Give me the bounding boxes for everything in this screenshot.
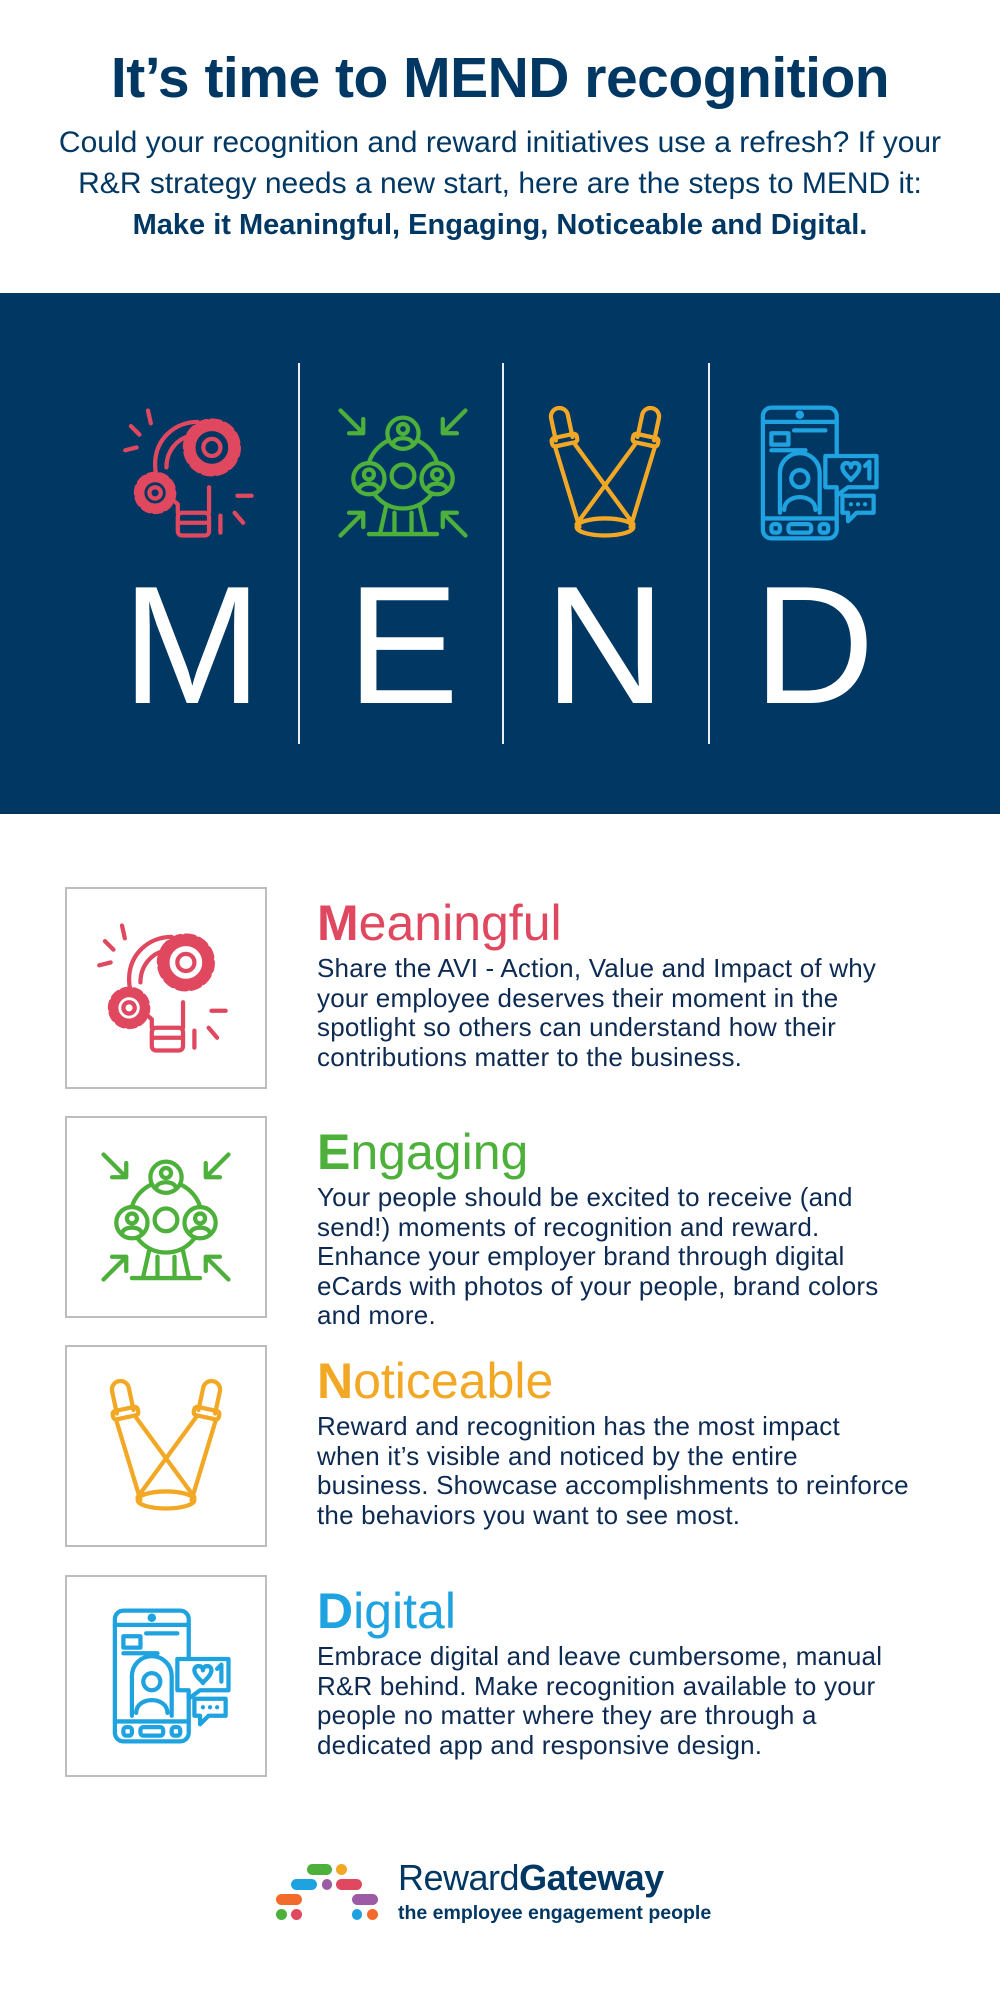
hero band: MEND (0, 293, 1000, 814)
icon box: spotlights (65, 1345, 267, 1547)
icon box: bulb (65, 887, 267, 1089)
icon: spotlights (548, 406, 662, 538)
logo mark (276, 1864, 378, 1920)
heading: Digital: Digital (317, 1583, 456, 1639)
card: Noticeable (65, 1345, 909, 1547)
text: Meaningful (317, 953, 876, 1072)
letter D: D (753, 551, 875, 739)
text: Meaningful: contributions matter to the business. (317, 1042, 742, 1072)
text: Digital: dedicated app and responsive design. (317, 1730, 762, 1760)
text: Engaging: Enhance your employer brand through digital (317, 1241, 844, 1271)
text: Engaging: and more. (317, 1300, 436, 1330)
icon: people group (338, 408, 468, 538)
subtitle: Make it Meaningful, Engaging, Noticeable and Digital. (133, 209, 867, 241)
icon box: phone (65, 1575, 267, 1777)
subtitle (59, 126, 941, 241)
text: Digital: people no matter where they are through a (317, 1700, 817, 1730)
letter E: E (347, 551, 459, 739)
text: Noticeable: when it’s visible and noticed by the entire (317, 1440, 798, 1470)
logo: Reward Gateway (276, 1857, 711, 1924)
text: Noticeable: business. Showcase accomplishments to reinforce (317, 1470, 909, 1500)
text: Digital: R&R behind. Make recognition available to your (317, 1670, 875, 1700)
text: Noticeable: Reward and recognition has the most impact (317, 1411, 840, 1441)
title: It’s time to MEND recognition (111, 46, 889, 110)
text: Noticeable: the behaviors you want to see most. (317, 1500, 740, 1530)
subtitle: Could your recognition and reward initiatives use a refresh? If your (59, 126, 941, 159)
heading: Engaging: Engaging (317, 1124, 528, 1180)
heading: Meaningful: Meaningful (317, 895, 562, 951)
icon: phone app (760, 406, 879, 540)
card: Engaging (65, 1116, 878, 1330)
heading: Noticeable: Noticeable (317, 1353, 553, 1409)
logo wordmark: RewardGateway (398, 1857, 664, 1898)
text: Digital (317, 1641, 882, 1760)
icon: bulb and gears (123, 408, 254, 538)
subtitle: R&R strategy needs a new start, here are the steps to MEND it: (78, 167, 922, 200)
text: Engaging: Your people should be excited to receive (and (317, 1182, 853, 1212)
text: Digital: Embrace digital and leave cumbersome, manual (317, 1641, 882, 1671)
text: Meaningful: Share the AVI - Action, Value and Impact of why (317, 953, 876, 983)
card: Digital (65, 1575, 882, 1777)
letter M: M (122, 551, 262, 739)
text: Engaging: send!) moments of recognition and reward. (317, 1212, 819, 1242)
icon box: people (65, 1116, 267, 1318)
letter N: N (544, 551, 666, 739)
tagline: the employee engagement people (398, 1902, 711, 1924)
card: Meaningful (65, 887, 876, 1089)
text: Meaningful: your employee deserves their moment in the (317, 982, 838, 1012)
text: Meaningful: spotlight so others can understand how their (317, 1012, 836, 1042)
text: Engaging (317, 1182, 878, 1330)
text: Noticeable (317, 1411, 909, 1530)
text: Engaging: eCards with photos of your people, brand colors (317, 1270, 878, 1300)
